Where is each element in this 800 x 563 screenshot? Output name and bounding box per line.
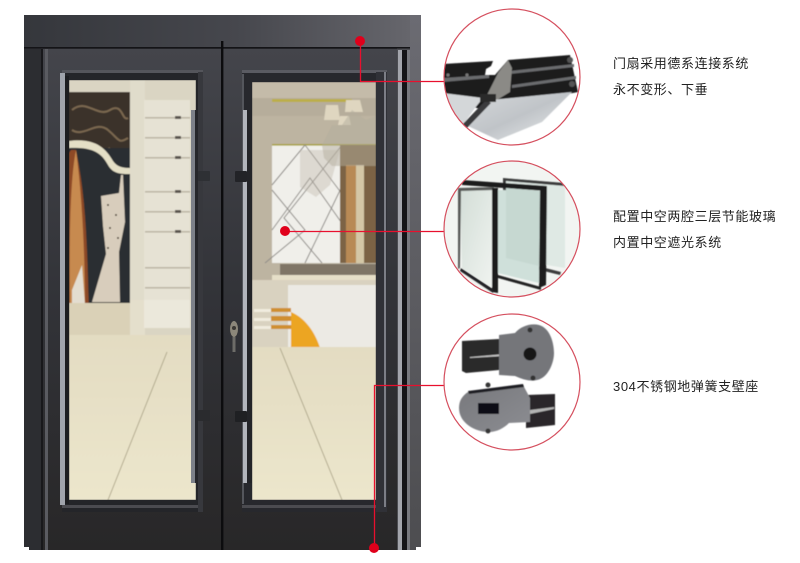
leader: glass [285,230,444,232]
red marker dots [280,36,379,553]
detail circle: insulated glass panes [444,161,580,297]
detail circle: stainless steel bracket [444,314,580,450]
caption: insulated glass [613,209,776,250]
upper bracket [462,339,499,373]
right door leaf [223,49,397,550]
leader: top connection [360,41,444,82]
caption: insulated glass: 内置中空遮光系统 [613,235,722,250]
left glass: interior reflection [69,80,196,500]
caption: connection system: 永不变形、下垂 [613,82,708,97]
door lock [230,321,238,352]
center seam [221,41,223,550]
leader: wall bracket [374,386,444,548]
left door pull handle [191,110,210,483]
caption: connection system [613,56,749,97]
left door leaf [41,49,222,550]
right door pull handle [235,110,252,483]
right glass: interior reflection [252,82,376,500]
caption: wall bracket: 304不锈钢地弹簧支壁座 [613,379,759,394]
callout leader lines [285,41,444,548]
caption: insulated glass: 配置中空两腔三层节能玻璃 [613,209,776,224]
outer frame [24,15,421,550]
lower bracket [526,394,555,428]
caption: connection system: 门扇采用德系连接系统 [613,56,749,71]
double door [24,15,421,550]
detail circle: door connection profile [443,9,580,145]
